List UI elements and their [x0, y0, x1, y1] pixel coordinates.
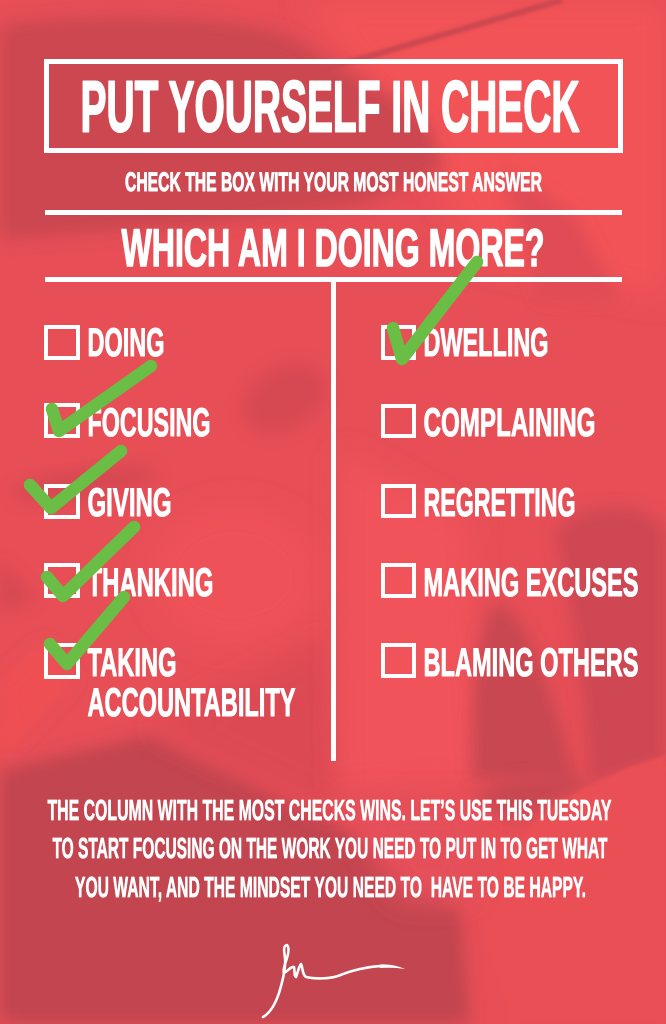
left column: checklist — [46, 321, 296, 725]
check: thanking — [47, 527, 134, 596]
bright collar sliver — [0, 640, 75, 760]
signature — [263, 945, 405, 1017]
eyes — [232, 350, 338, 446]
item: complaining — [383, 401, 596, 445]
check: giving — [30, 451, 121, 508]
item: thanking: THANKING — [88, 561, 214, 605]
bright upper right wall — [300, 0, 666, 300]
fingers — [472, 605, 575, 780]
check: focusing — [52, 366, 151, 431]
shirt — [0, 735, 470, 1024]
item: regretting — [383, 481, 576, 525]
cheek — [150, 505, 320, 645]
item: focusing: FOCUSING — [88, 401, 210, 445]
item: taking accountability: TAKING — [88, 641, 176, 685]
item: doing: DOING — [88, 321, 164, 365]
question heading with rules — [45, 210, 622, 282]
window frame bar — [322, 0, 562, 70]
hair — [0, 17, 445, 240]
item: taking accountability: ACCOUNTABILITY — [88, 681, 296, 725]
item: giving: GIVING — [88, 481, 172, 525]
item: giving — [46, 481, 172, 525]
check: taking accountability — [50, 597, 124, 664]
column divider — [331, 281, 336, 761]
lower hand — [480, 755, 666, 1024]
item: dwelling — [383, 321, 548, 365]
title box — [46, 62, 620, 150]
green check marks — [30, 262, 477, 664]
item: doing — [46, 321, 164, 365]
item: thanking — [46, 561, 214, 605]
item: focusing — [46, 401, 210, 445]
item: dwelling: DWELLING — [424, 321, 548, 365]
item: taking accountability — [46, 641, 296, 725]
right column: checklist — [383, 321, 638, 685]
left fist glow — [340, 450, 480, 790]
check: dwelling — [393, 262, 477, 359]
closing message — [48, 795, 612, 904]
